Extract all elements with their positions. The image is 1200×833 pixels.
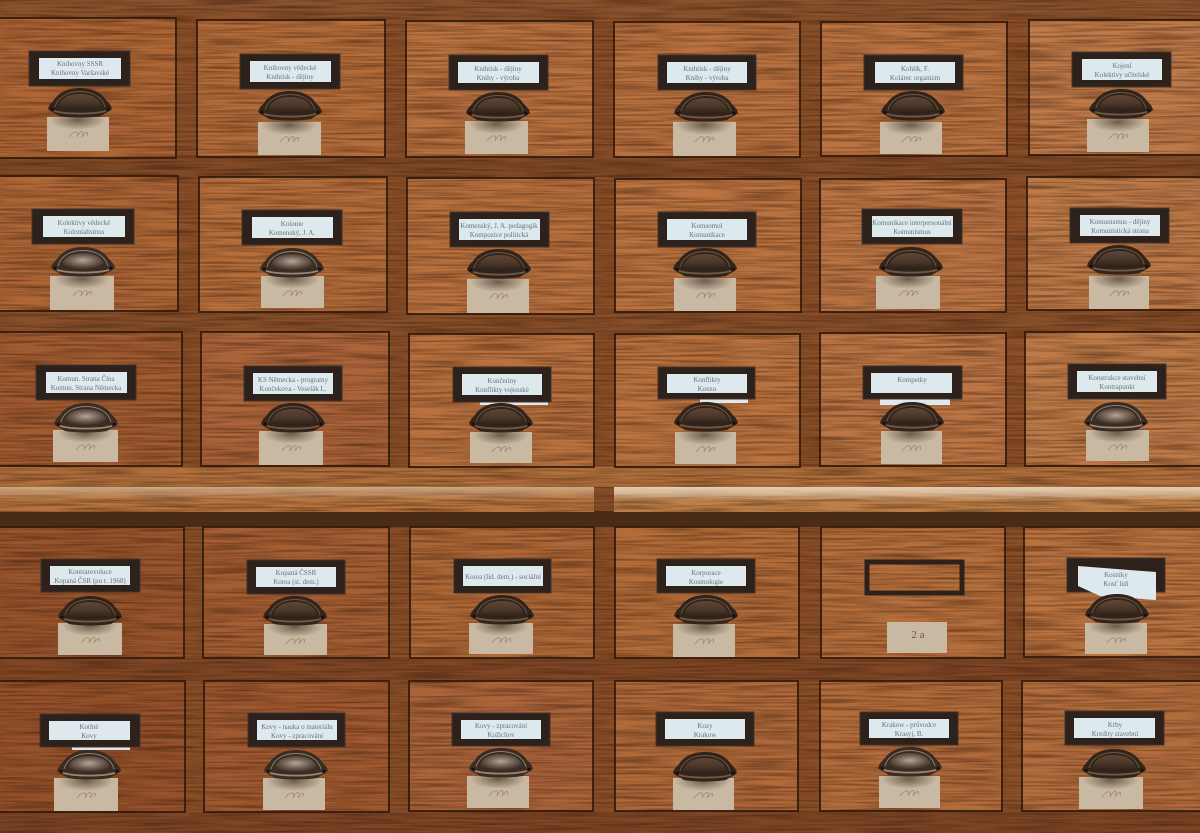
drawer face [0,681,185,812]
label holder [863,366,962,399]
label holder: Kosť lidí [1103,580,1129,588]
label holder [657,559,755,593]
label holder [1065,711,1164,745]
drawer face [407,178,594,314]
drawer row 3 column 1 [0,332,182,466]
label holder: Kontrarevoluce [68,568,112,576]
drawer face [1027,177,1200,310]
pull handle [1087,245,1151,274]
drawer row 4 column 1 [0,527,184,658]
drawer face [204,681,389,812]
label holder [41,559,140,592]
label holder: Kožichov [487,731,515,739]
drawer face [409,334,594,467]
drawer row 1 column 5 [821,22,1007,156]
card [674,271,736,311]
card [673,115,736,156]
pull handle [673,248,737,278]
label holder: Knihovny SSSR [57,60,103,68]
drawer row 3 column 4 [615,334,800,467]
label holder: Knihovny Varšavské [51,69,109,77]
ledge shadow [0,511,1200,527]
pull handle [674,595,738,624]
card [258,115,321,155]
label holder [1068,364,1166,399]
label holder: Kovy - zpracování [271,732,323,740]
label holder: Komun. Strana Německa [51,384,122,392]
pull handle [1082,749,1146,778]
drawer row 5 column 3 [409,681,593,811]
card [261,269,324,308]
label holder [240,54,340,89]
drawer face [820,333,1006,466]
drawer row 5 column 4 [615,681,798,811]
drawer face [197,20,385,157]
label holder [656,712,754,746]
label holder: Komunikace [689,231,725,239]
drawer row 4 column 2 [203,527,389,658]
card [467,769,529,808]
pull handle [1084,402,1148,432]
card [53,423,118,462]
pull handle [258,91,322,120]
drawer face [409,681,593,811]
label holder [40,714,140,747]
pull handle [878,747,942,776]
label holder [36,365,136,400]
drawer row 3 column 2 [201,332,389,466]
shelf ledges [0,487,1200,527]
right ledge [614,487,1200,512]
card [469,616,533,654]
label holder [242,210,342,245]
label holder [449,55,548,90]
drawer row 4 column 3 [410,527,594,658]
drawer row 3 column 3 [409,334,594,467]
label holder: Kolonialismus [64,228,105,236]
label holder: Knihy - výroba [477,74,520,82]
label holder: Kolárec organizm [890,74,941,82]
card [467,272,529,313]
card [881,424,942,464]
label holder: Kolektivy učitelské [1095,71,1149,79]
label holder: Kojení [1112,62,1132,70]
label holder: Konzo [698,385,717,393]
label holder: Knihy - výroba [686,74,729,82]
pull handle [48,88,112,118]
pull handle [469,403,533,432]
pull handle [57,750,121,780]
card [1089,269,1149,309]
label holder [453,367,551,402]
drawer row 2 column 1 [0,176,178,311]
label holder: Končekova - Veselák L. [259,385,327,393]
label holder: Komun. Strana Čína [57,375,116,383]
drawer face [199,177,387,312]
torn paper strip [72,746,130,750]
drawer face [615,179,801,312]
card [465,114,528,154]
pull handle [466,92,530,122]
label holder: Kovy [81,732,97,740]
label holder: Konstrukce stavební [1088,374,1146,382]
label holder [1072,52,1171,87]
label holder: Kovy - nauka o materiálu [261,723,333,731]
label holder: Komunikace interpersonální [872,219,952,227]
label holder [29,51,130,86]
left ledge [0,487,594,512]
drawer row 4 column 6 [1024,527,1200,657]
label holder: Kozy [697,722,713,730]
label holder [244,366,342,401]
card [1079,770,1143,809]
pull handle [1089,89,1153,118]
label holder [1067,558,1165,600]
card [263,771,325,810]
drawer row 1 column 2 [197,20,385,157]
drawer face [615,334,800,467]
label holder: Kompetky [897,376,927,384]
drawer row 3 column 6 [1025,332,1200,466]
label holder [864,55,963,90]
label holder: Krasyj, B. [895,730,924,738]
label holder: Kohlík, F. [901,65,929,73]
card [675,425,736,464]
drawer face [0,332,182,466]
drawer row 5 column 6 [1022,681,1200,811]
card [264,617,327,655]
drawer row 1 column 6 [1029,20,1200,155]
label holder: Komunistická strana [1091,227,1150,235]
drawer face [821,22,1007,156]
label holder [658,55,756,90]
label holder [860,712,958,745]
drawer face [1029,20,1200,155]
label holder [1070,208,1169,243]
pull handle [58,596,122,626]
pull handle [469,748,533,778]
drawer face [615,527,799,658]
label holder [658,212,756,247]
label holder: Kovy - zpracování [475,722,527,730]
label holder [658,367,755,399]
drawer row 2 column 3 [407,178,594,314]
card [876,269,940,309]
drawer face [203,527,389,658]
drawer face [1022,681,1200,811]
card [879,769,940,808]
label holder: Kontrapunkt [1099,383,1135,391]
label holder: Kolektivy vědecké [58,219,110,227]
torn paper strip [880,398,950,405]
pull handle [467,249,531,278]
label holder: Knihtisk - dějiny [474,65,522,73]
label holder: Korporace [691,569,721,577]
card [673,771,734,810]
label holder: Kosníky [1104,571,1128,579]
label holder: Komunismus - dějiny [1090,218,1151,226]
label holder [454,559,551,593]
label holder: Knihovny vědecké [264,64,316,72]
drawer face [615,681,798,811]
drawer face [820,681,1002,811]
drawer row 4 column 4 [615,527,799,658]
drawer face [1024,527,1200,657]
pull handle [673,752,737,782]
label holder: Korea (lid. dem.) - sociální [465,573,541,581]
drawer face [1025,332,1200,466]
drawer face [820,179,1006,312]
drawer row 1 column 1 [0,18,176,158]
pull handle [261,403,325,432]
label holder: Kotlné [79,723,99,731]
drawer row 3 column 5 [820,333,1006,466]
drawer row 2 column 6 [1027,177,1200,310]
label holder: Komsomol [691,222,723,230]
card [259,424,323,465]
pull handle [51,247,115,276]
label holder [862,209,962,244]
pull handle [674,402,738,432]
card [1087,112,1149,152]
card: 2 a [911,629,925,641]
label holder: Kompozice politická [470,231,529,239]
pull handle [1085,594,1149,624]
drawer face [0,18,176,158]
label holder: Korea (st. dem.) [273,578,319,586]
drawer row 5 column 5 [820,681,1002,811]
pull handle [880,402,944,432]
drawer row 1 column 4 [614,22,800,157]
card [1086,423,1149,461]
pull handle [264,750,328,780]
torn paper strip [700,399,748,403]
card [880,115,942,154]
label holder: Krakow - průvodce [882,721,936,729]
pull handle [879,247,943,276]
pull handle [260,248,324,278]
label holder: Komenský, J. A. [269,229,315,237]
drawer row 2 column 2 [199,177,387,312]
label holder: Kosmologie [689,578,723,586]
label holder [450,212,549,247]
drawer row 2 column 5 [820,179,1006,312]
drawer row 1 column 3 [406,21,593,157]
label holder [32,209,134,244]
drawer face [0,176,178,311]
drawer face [0,527,184,658]
card [47,110,109,151]
label holder [247,560,345,594]
label holder: KS Německa - programy [258,376,329,384]
torn paper strip [480,400,548,405]
pull handle [263,596,327,626]
pull handle [881,91,945,120]
label holder: Krakow [694,731,717,739]
pull handle [674,92,738,122]
label holder: Kopaná ČSR (po r. 1968) [54,577,126,585]
card [58,616,122,655]
label holder: Knihtisk - dějiny [266,73,314,81]
card [887,622,947,653]
drawer row 5 column 1 [0,681,185,812]
card [54,771,118,811]
card [50,269,114,310]
pull handle [470,595,534,624]
card [470,425,532,463]
label holder: Knihtisk - dějiny [683,65,731,73]
empty label holder [867,562,962,593]
label holder: Komenský, J. A. pedagogik [460,222,538,230]
label holder [452,713,550,746]
label holder: Končetiny [487,377,517,385]
drawer face [821,527,1005,658]
card [1085,616,1147,654]
drawer face [614,22,800,157]
label holder: Krby [1108,721,1123,729]
card [673,617,735,657]
label holder: Konflikty vojenské [475,386,529,394]
drawer face [406,21,593,157]
label holder: Kolonie [281,220,303,228]
drawer row 2 column 4 [615,179,801,312]
pull handle [54,403,118,432]
label holder: Konflikty [693,376,721,384]
drawer face [410,527,594,658]
label holder [248,713,345,747]
label holder: Komunismus [893,228,931,236]
label holder: Kopaná ČSSR [276,569,317,577]
drawer row 5 column 2 [204,681,389,812]
drawer face [201,332,389,466]
drawer row 4 column 5 (empty holder) [821,527,1005,658]
label holder: Kredity stavební [1092,730,1138,738]
